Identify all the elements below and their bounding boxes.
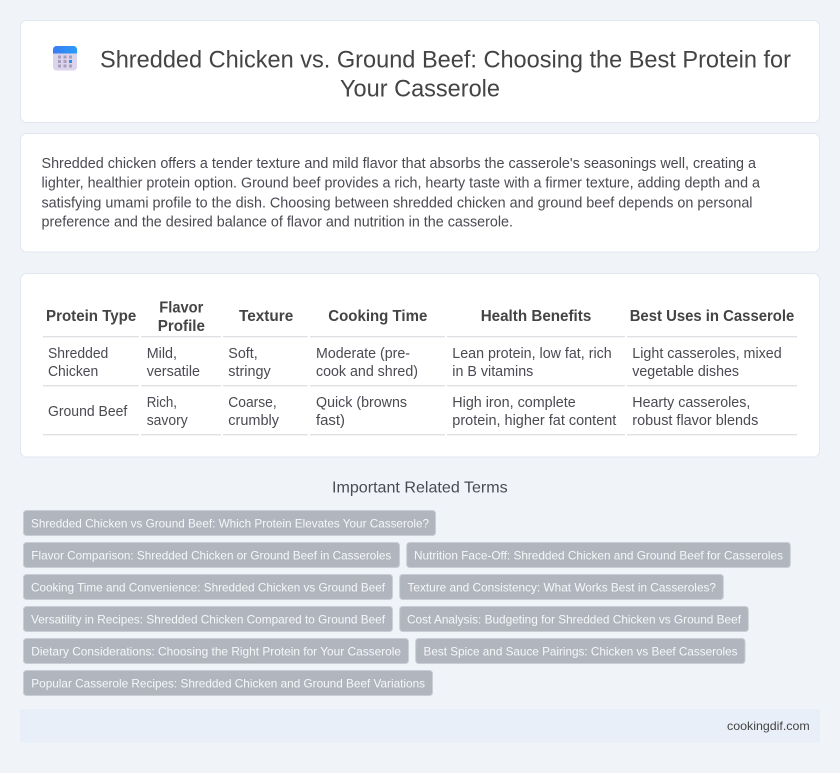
table header row bbox=[46, 299, 794, 335]
intro text: satisfying umami profile to the dish. Choosing between shredded chicken and ground beef depends on personal bbox=[42, 195, 752, 211]
tag bbox=[24, 574, 392, 600]
tag: Cost Analysis: Budgeting for Shredded Chicken vs Ground Beef bbox=[407, 612, 742, 626]
tag: Nutrition Face-Off: Shredded Chicken and Ground Beef for Casseroles bbox=[414, 548, 783, 562]
table row: ground beef: robust flavor blends bbox=[632, 413, 758, 429]
table row: shredded chicken: vegetable dishes bbox=[632, 364, 739, 380]
table row: shredded chicken: Light casseroles, mixed bbox=[632, 346, 782, 362]
table row: ground beef: Coarse, bbox=[228, 395, 277, 411]
tag bbox=[407, 542, 790, 568]
tag bbox=[24, 638, 408, 664]
table row: ground beef bbox=[48, 395, 758, 429]
title bbox=[100, 46, 791, 103]
table row: ground beef: fast) bbox=[316, 413, 345, 429]
table row: ground beef: Hearty casseroles, bbox=[632, 395, 750, 411]
table row: shredded chicken: in B vitamins bbox=[452, 364, 533, 380]
table row: shredded chicken: Shredded bbox=[48, 346, 108, 362]
tag: Best Spice and Sauce Pairings: Chicken vs Beef Casseroles bbox=[424, 644, 738, 658]
table row: shredded chicken bbox=[48, 346, 782, 380]
table row: shredded chicken: versatile bbox=[147, 364, 200, 380]
table row: shredded chicken: Lean protein, low fat, rich bbox=[452, 346, 612, 362]
tag bbox=[400, 606, 748, 632]
tag bbox=[24, 542, 400, 568]
heading: important related terms: Important Related Terms bbox=[332, 480, 508, 497]
footer bar bbox=[20, 709, 820, 743]
related term tags bbox=[24, 510, 790, 696]
table row: ground beef: Quick (browns bbox=[316, 395, 407, 411]
tag: Shredded Chicken vs Ground Beef: Which Protein Elevates Your Casserole? bbox=[31, 516, 429, 530]
footer source: cookingdif.com bbox=[727, 719, 810, 733]
table row: shredded chicken: Soft, bbox=[228, 346, 258, 362]
intro text: Shredded chicken offers a tender texture and mild flavor that absorbs the casserole's seasonings well, creating a bbox=[42, 156, 756, 172]
table row: ground beef: High iron, complete bbox=[452, 395, 576, 411]
table row: ground beef: Rich, bbox=[147, 395, 177, 411]
table row: shredded chicken: Chicken bbox=[48, 364, 98, 380]
table row: shredded chicken: stringy bbox=[228, 364, 271, 380]
title: Your Casserole bbox=[340, 76, 500, 103]
table header row: Flavor bbox=[159, 299, 203, 316]
title: Shredded Chicken vs. Ground Beef: Choosing the Best Protein for bbox=[100, 46, 791, 74]
tag: Popular Casserole Recipes: Shredded Chicken and Ground Beef Variations bbox=[31, 676, 425, 690]
tag: Dietary Considerations: Choosing the Right Protein for Your Casserole bbox=[31, 644, 401, 658]
panel: introduction bbox=[20, 134, 820, 252]
panel: header bbox=[20, 20, 820, 122]
tag bbox=[400, 574, 723, 600]
table row: shredded chicken: cook and shred) bbox=[316, 364, 418, 380]
tag bbox=[24, 510, 436, 536]
table row: shredded chicken: Moderate (pre- bbox=[316, 346, 410, 362]
tag bbox=[24, 606, 392, 632]
table row: ground beef: crumbly bbox=[228, 413, 280, 429]
table header row: Profile bbox=[158, 318, 205, 335]
tag: Texture and Consistency: What Works Best in Casseroles? bbox=[408, 580, 716, 594]
table header row: Best Uses in Casserole bbox=[630, 308, 794, 325]
table header row: Health Benefits bbox=[481, 308, 591, 325]
tag: Versatility in Recipes: Shredded Chicken Compared to Ground Beef bbox=[31, 612, 386, 626]
tag: Cooking Time and Convenience: Shredded Chicken vs Ground Beef bbox=[31, 580, 386, 594]
tag: Flavor Comparison: Shredded Chicken or Ground Beef in Casseroles bbox=[31, 548, 391, 562]
tag bbox=[24, 670, 432, 696]
table header row: Texture bbox=[239, 308, 293, 325]
table header row: Protein Type bbox=[46, 308, 136, 325]
intro text bbox=[42, 156, 760, 230]
table row: ground beef: protein, higher fat content bbox=[452, 413, 616, 429]
table row: ground beef: savory bbox=[147, 413, 188, 429]
tag bbox=[416, 638, 745, 664]
panel: comparison table bbox=[20, 274, 820, 457]
table header row: Cooking Time bbox=[328, 308, 427, 325]
intro text: lighter, healthier protein option. Ground beef provides a rich, hearty taste with a firmer texture, adding depth and a bbox=[42, 176, 760, 192]
intro text: preference and the desired balance of flavor and nutrition in the casserole. bbox=[42, 214, 513, 230]
table row: shredded chicken: Mild, bbox=[147, 346, 177, 362]
table row: ground beef: Ground Beef bbox=[48, 404, 128, 420]
icon: calendar bbox=[53, 46, 77, 70]
